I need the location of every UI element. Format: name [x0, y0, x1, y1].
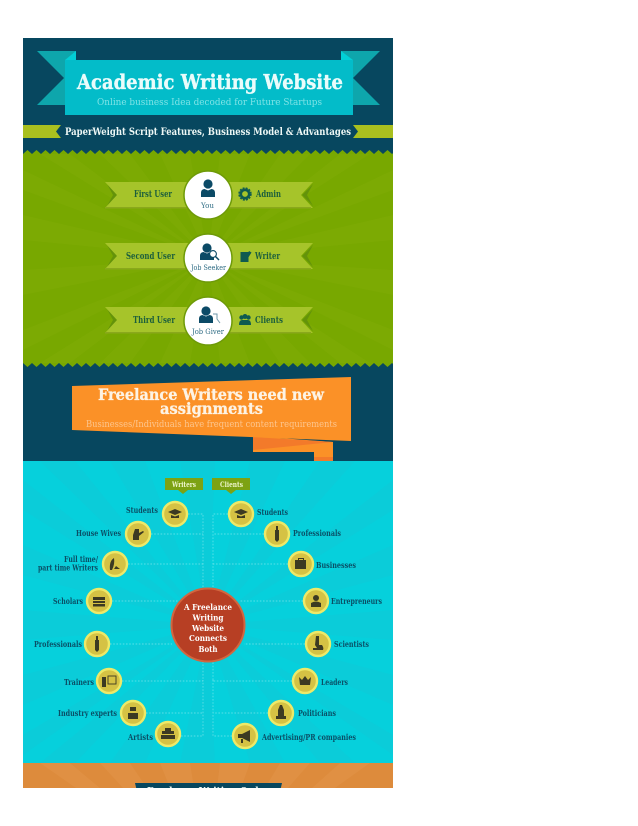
- row: second user: [105, 234, 313, 282]
- panel: orange footer: [23, 763, 393, 788]
- panel: user roles: [23, 150, 393, 367]
- row: third user: Job Giver: [191, 328, 225, 336]
- subtitle: Online business Idea decoded for Future Startups: [97, 97, 322, 108]
- left node: professionals: Professionals: [34, 639, 82, 649]
- panel: freelance banner: [23, 363, 393, 461]
- icon: person with magnifier: [200, 243, 219, 260]
- center circle: Writing: [192, 614, 224, 624]
- right node: leaders: Leaders: [321, 677, 348, 687]
- ribbon: left fold: [65, 51, 76, 60]
- right node: scientists: Scientists: [334, 639, 369, 649]
- strip: right green band: [353, 125, 393, 138]
- right node: politicians: [269, 701, 336, 725]
- tag: clients: Clients: [220, 480, 243, 489]
- ribbon: left tail: [37, 51, 76, 105]
- left node: students: [126, 502, 187, 526]
- row: third user: [105, 297, 313, 345]
- left node: scholars: [53, 589, 111, 613]
- row: second user: Job Seeker: [190, 264, 227, 272]
- left node: students: Students: [126, 505, 158, 515]
- center circle: Connects: [189, 634, 227, 644]
- right node: professionals: Professionals: [293, 528, 341, 538]
- row: second user: Second User: [126, 252, 175, 262]
- center circle: Both: [198, 645, 218, 655]
- left node: house wives: [76, 522, 150, 546]
- center circle: Website: [191, 624, 224, 634]
- right node: advertising: Advertising/PR companies: [261, 732, 356, 742]
- row: first user: You: [200, 202, 214, 210]
- right node: businesses: [289, 552, 356, 576]
- tag: writers: Writers: [171, 480, 196, 489]
- right node: entrepreneurs: Entrepreneurs: [331, 596, 382, 606]
- banner: main shape: [72, 377, 351, 441]
- left node: industry experts: [58, 701, 145, 725]
- row: first user: Admin: [255, 190, 281, 200]
- row: third user: Clients: [255, 316, 283, 326]
- row: first user: First User: [134, 190, 172, 200]
- left node: industry experts: Industry experts: [58, 708, 117, 718]
- icon: writer notes: [240, 251, 252, 262]
- right node: professionals: [265, 522, 341, 546]
- ribbon: main banner: [65, 60, 353, 115]
- row: third user: Third User: [133, 316, 175, 326]
- left node: full time writers: [38, 552, 127, 576]
- footer banner: [135, 783, 282, 788]
- right node: businesses: Businesses: [316, 560, 356, 570]
- center circle: A Freelance: [183, 603, 232, 613]
- center circle: [172, 588, 244, 662]
- panel: header: [23, 38, 393, 154]
- ribbon: right fold: [341, 51, 353, 60]
- left node: trainers: Trainers: [64, 677, 94, 687]
- right node: scientists: [306, 632, 369, 656]
- right node: politicians: Politicians: [298, 708, 336, 718]
- left node: trainers: [64, 669, 121, 693]
- right node: entrepreneurs: [304, 589, 382, 613]
- left node: scholars: Scholars: [53, 596, 83, 606]
- left node: house wives: House Wives: [76, 528, 121, 538]
- icon: clients group: [239, 314, 251, 325]
- connector lines: [110, 514, 305, 736]
- banner heading line 1: Freelance Writers need new: [98, 385, 325, 404]
- icon: person: [201, 179, 215, 197]
- strip: left green band: [23, 125, 61, 138]
- right node: students: [229, 502, 288, 526]
- icon: gear: [239, 188, 251, 200]
- banner subtitle: Businesses/Individuals have frequent content requirements: [86, 420, 337, 430]
- right node: students: Students: [257, 507, 288, 517]
- right node: advertising: [233, 724, 356, 748]
- icon: person with chart: [199, 306, 220, 323]
- tag: clients: [212, 478, 250, 494]
- ribbon: right tail: [341, 51, 380, 105]
- banner heading line 2: assignments: [160, 399, 263, 418]
- tag: writers: [165, 478, 203, 494]
- footer heading: Freelance Writing Order: [147, 785, 269, 798]
- row: second user: Writer: [254, 252, 280, 262]
- left node: professionals: [34, 632, 109, 656]
- title: Academic Writing Website: [76, 70, 343, 94]
- left node: full time writers: part time Writers: [38, 562, 98, 572]
- panel: connections diagram: [23, 461, 393, 763]
- subheading: PaperWeight Script Features, Business Model & Advantages: [65, 127, 351, 138]
- banner: lower fold: [253, 436, 333, 460]
- left node: artists: [127, 722, 180, 746]
- left node: artists: Artists: [127, 732, 153, 742]
- row: first user: [105, 171, 313, 219]
- right node: leaders: [293, 669, 348, 693]
- left node: full time writers: Full time/: [64, 554, 99, 564]
